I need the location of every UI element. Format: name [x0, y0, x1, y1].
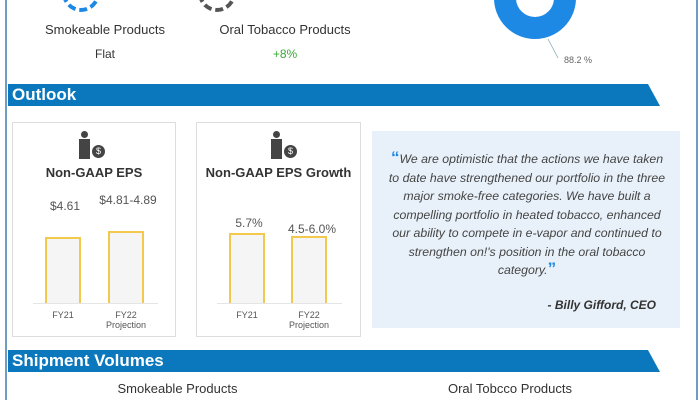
bar chart: $4.61	[50, 199, 80, 213]
bar chart	[217, 216, 342, 330]
text: oral shipments: Oral Tobcco Products	[448, 381, 572, 396]
bar chart: 4.5-6.0%	[288, 222, 336, 236]
donut chart: 88.2 %	[564, 55, 592, 65]
icon: person dollar	[79, 131, 105, 159]
heading: shipment volumes	[8, 350, 660, 372]
text: smokeable: Flat	[95, 47, 115, 61]
text: oral	[219, 22, 351, 61]
text: smokeable	[45, 22, 165, 61]
bar chart: FY21	[236, 310, 258, 320]
bar chart: 5.7%	[235, 216, 263, 230]
callout: CEO quote	[372, 131, 680, 328]
icon: person dollar	[271, 131, 297, 159]
icon: person dollar: $	[96, 146, 101, 156]
heading: outlook	[8, 84, 660, 106]
bar chart	[33, 193, 158, 330]
title: Non-GAAP EPS Growth	[206, 165, 351, 180]
text: oral: Oral Tobacco Products	[219, 22, 351, 37]
icon: person dollar: $	[288, 146, 293, 156]
icon: smokeable dashed circle	[62, 0, 100, 12]
text: oral: +8%	[273, 47, 297, 61]
heading: shipment volumes: Shipment Volumes	[12, 351, 164, 370]
bar chart: $4.81-4.89	[99, 193, 157, 207]
text: smokeable shipments: Smokeable Products	[118, 381, 237, 396]
donut chart	[494, 0, 592, 65]
icon: oral dashed circle	[198, 0, 236, 12]
title: Non-GAAP EPS	[46, 165, 142, 180]
callout: CEO quote: - Billy Gifford, CEO	[548, 298, 656, 312]
panel: EPS	[12, 122, 176, 337]
callout: CEO quote: “We are optimistic that the actions we have taken to date have strengthened our portfolio in the three major smoke-free categories. We have built a compelling portfolio in heated tobacco, enhanced our ability to compete in e-vapor and continued to strengthen on!'s position in the oral tobacco category.”	[389, 148, 665, 278]
text: smokeable: Smokeable Products	[45, 22, 165, 37]
bar chart: Projection	[289, 320, 329, 330]
bar chart: Projection	[106, 320, 146, 330]
bar chart: FY21	[52, 310, 74, 320]
heading: outlook: Outlook	[12, 85, 76, 104]
panel: EPS growth	[196, 122, 361, 337]
bar chart: FY22	[115, 310, 137, 320]
bar chart: FY22	[298, 310, 320, 320]
